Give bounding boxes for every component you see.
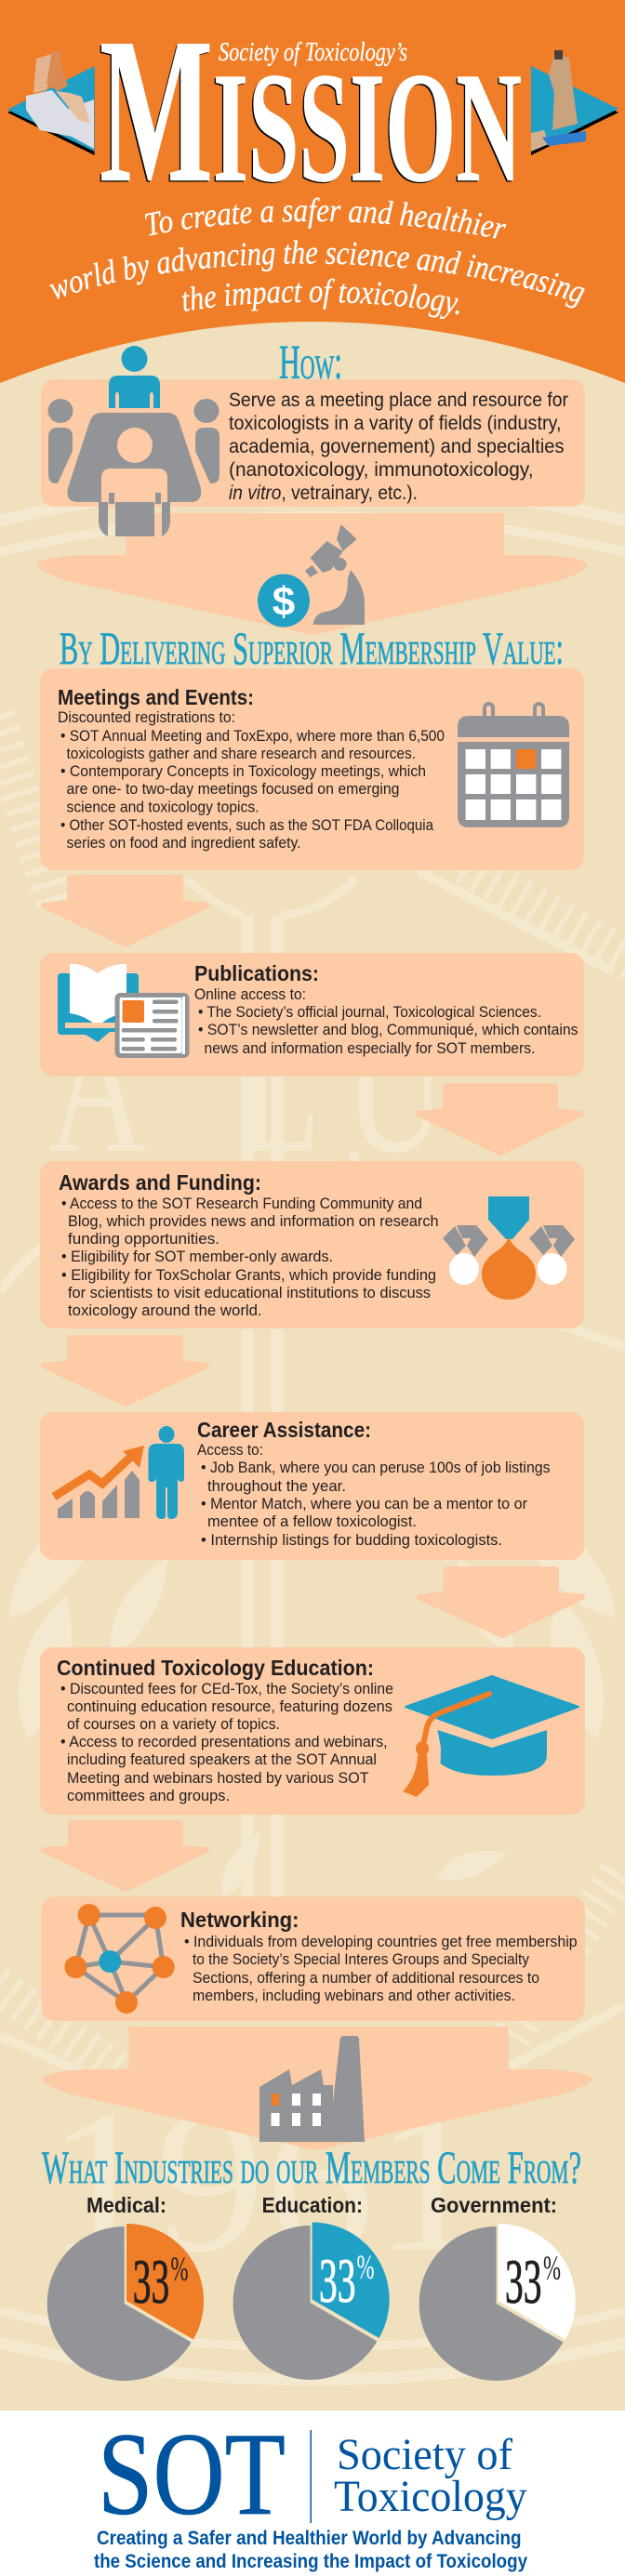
list: committees and groups. xyxy=(67,1787,230,1804)
illustration: arm with pipette on blue triangle xyxy=(531,50,618,155)
list: of courses on a variety of topics. xyxy=(67,1715,280,1733)
list: • Other SOT-hosted events, such as the SOT FDA Colloquia xyxy=(60,816,433,834)
pie chart: education: % xyxy=(357,2249,374,2287)
list: mentee of a fellow toxicologist. xyxy=(207,1513,417,1530)
how text: academia, governement) and specialties xyxy=(229,436,564,457)
dollar coin xyxy=(258,575,310,627)
panel: networking xyxy=(42,1896,585,2021)
list: • The Society’s official journal, Toxicological Sciences. xyxy=(198,1003,541,1021)
title: Awards and Funding: xyxy=(59,1170,261,1195)
logo: SOT: SOT xyxy=(98,2410,286,2540)
icon: graduation cap xyxy=(403,1676,578,1797)
list: • Contemporary Concepts in Toxicology meetings, which xyxy=(60,762,426,780)
value: 33 xyxy=(133,2246,169,2317)
heading: How: How: xyxy=(279,337,342,390)
value: 33 xyxy=(319,2245,355,2316)
list: • SOT’s newsletter and blog, Communiqué, which contains xyxy=(198,1021,578,1038)
list: to the Society’s Special Interes Groups and Specialty xyxy=(193,1950,529,1968)
how text: Serve as a meeting place and resource for xyxy=(229,390,568,411)
top person xyxy=(109,346,160,408)
mission statement xyxy=(49,197,585,319)
icon: meeting table with people xyxy=(48,346,219,536)
list xyxy=(194,985,578,1057)
icon: microscope with dollar: $ xyxy=(273,579,295,625)
list: are one- to two-day meetings focused on emerging xyxy=(67,780,400,798)
subtitle: Society of Toxicology’s xyxy=(219,38,407,67)
how text xyxy=(229,390,568,504)
panel: meetings and events xyxy=(40,668,584,870)
panel: continued toxicology education xyxy=(40,1647,585,1815)
list: • Access to the SOT Research Funding Community and xyxy=(61,1195,422,1212)
illustration: scientist with flask on blue triangle xyxy=(7,51,95,155)
list: toxicology around the world. xyxy=(68,1301,262,1319)
icon: microscope with dollar xyxy=(258,524,365,627)
text: 1961 xyxy=(47,2067,484,2294)
list: Blog, which provides news and information on research xyxy=(68,1212,439,1230)
list: toxicologists gather and share research and resources. xyxy=(67,745,416,762)
list: funding opportunities. xyxy=(68,1230,219,1248)
value: 33 xyxy=(505,2246,541,2317)
mission statement: To create a safer and healthier xyxy=(145,197,506,239)
list: continuing education resource, featuring dozens xyxy=(67,1698,392,1715)
tagline: Creating a Safer and Healthier World by Advancing xyxy=(97,2528,522,2549)
list: Online access to: xyxy=(194,985,306,1003)
panel: publications xyxy=(40,953,584,1077)
pie chart: government: % xyxy=(543,2250,561,2288)
footer: Toxicology xyxy=(334,2472,527,2521)
how text: (nanotoxicology, immunotoxicology, xyxy=(229,459,534,481)
title: Career Assistance: xyxy=(197,1418,371,1442)
text: U xyxy=(344,978,446,1194)
pie chart: government xyxy=(419,2193,576,2381)
list: • Job Bank, where you can peruse 100s of job listings xyxy=(201,1459,551,1476)
list: • Discounted fees for CEd-Tox, the Society’s online xyxy=(60,1680,393,1698)
arrow: how to value xyxy=(37,513,588,634)
list xyxy=(197,1441,551,1549)
how text: toxicologists in a varity of fields (industry, xyxy=(229,413,562,434)
list: members, including webinars and other activities. xyxy=(193,1987,515,2004)
arrow: down left 3 xyxy=(44,1823,206,1889)
title: Continued Toxicology Education: xyxy=(57,1656,374,1680)
list: • Mentor Match, where you can be a mentor to or xyxy=(201,1495,527,1513)
list: • Eligibility for SOT member-only awards. xyxy=(61,1248,333,1265)
footer: the Science and Increasing the Impact of Toxicology xyxy=(94,2551,527,2572)
list: Access to: xyxy=(197,1441,263,1459)
list: • Access to recorded presentations and webinars, xyxy=(60,1733,388,1750)
list xyxy=(58,708,445,852)
title: Meetings and Events: xyxy=(58,685,254,709)
mission statement: world by advancing the science and increasing xyxy=(49,240,585,309)
icon: medals xyxy=(443,1196,575,1300)
list xyxy=(184,1933,578,2004)
label: Government: xyxy=(431,2193,557,2217)
text: A xyxy=(48,978,146,1194)
icon: calendar xyxy=(458,704,569,827)
arrow: down left 1 xyxy=(44,878,206,945)
list: for scientists to visit educational institutions to discuss xyxy=(68,1284,431,1301)
panel: career assistance xyxy=(40,1412,584,1560)
list xyxy=(60,1680,393,1804)
arrow: down left 2 xyxy=(44,1338,206,1404)
label: Medical: xyxy=(86,2193,166,2217)
icon: factory xyxy=(259,2036,365,2142)
arrow: down right 1 xyxy=(419,1086,581,1153)
icon: network nodes xyxy=(64,1904,175,2014)
how text: in vitro, vetrainary, etc.). xyxy=(229,482,418,504)
list: • Internship listings for budding toxicologists. xyxy=(201,1531,502,1549)
list: • Individuals from developing countries get free membership xyxy=(184,1933,578,1950)
list: Discounted registrations to: xyxy=(58,708,235,726)
arrow: networking to industries xyxy=(42,2027,592,2149)
panel: how xyxy=(41,379,585,507)
panel: awards and funding xyxy=(40,1161,584,1328)
mission statement: the impact of toxicology. xyxy=(182,279,459,319)
list: including featured speakers at the SOT Annual xyxy=(67,1750,377,1768)
pie chart: education xyxy=(233,2193,390,2380)
pie chart: medical: % xyxy=(171,2251,188,2289)
title: Society of Toxicology's Mission xyxy=(99,0,522,227)
text: L xyxy=(237,978,321,1194)
icon: growth chart with person xyxy=(54,1426,184,1519)
orange header band xyxy=(0,0,625,383)
list: Meeting and webinars hosted by various SOT xyxy=(67,1769,368,1787)
list: news and information especially for SOT members. xyxy=(205,1039,536,1057)
arrow: down right 2 xyxy=(419,1569,582,1635)
label: Education: xyxy=(262,2193,363,2217)
list: Sections, offering a number of additional resources to xyxy=(193,1969,539,1987)
list: throughout the year. xyxy=(207,1477,346,1495)
list: • SOT Annual Meeting and ToxExpo, where more than 6,500 xyxy=(60,727,445,745)
table xyxy=(67,413,201,502)
list: • Eligibility for ToxScholar Grants, which provide funding xyxy=(61,1266,436,1284)
side people xyxy=(48,399,219,483)
title: Publications: xyxy=(194,961,319,985)
logo: Society of Toxicology: Society of xyxy=(337,2430,512,2479)
title: Networking: xyxy=(180,1908,299,1932)
icon: book and newspaper xyxy=(58,964,190,1058)
front person xyxy=(117,428,153,463)
list: science and toxicology topics. xyxy=(67,798,259,816)
footer xyxy=(0,2410,625,2576)
list: series on food and ingredient safety. xyxy=(67,834,301,852)
list xyxy=(61,1195,439,1319)
pie chart: medical xyxy=(47,2193,204,2381)
